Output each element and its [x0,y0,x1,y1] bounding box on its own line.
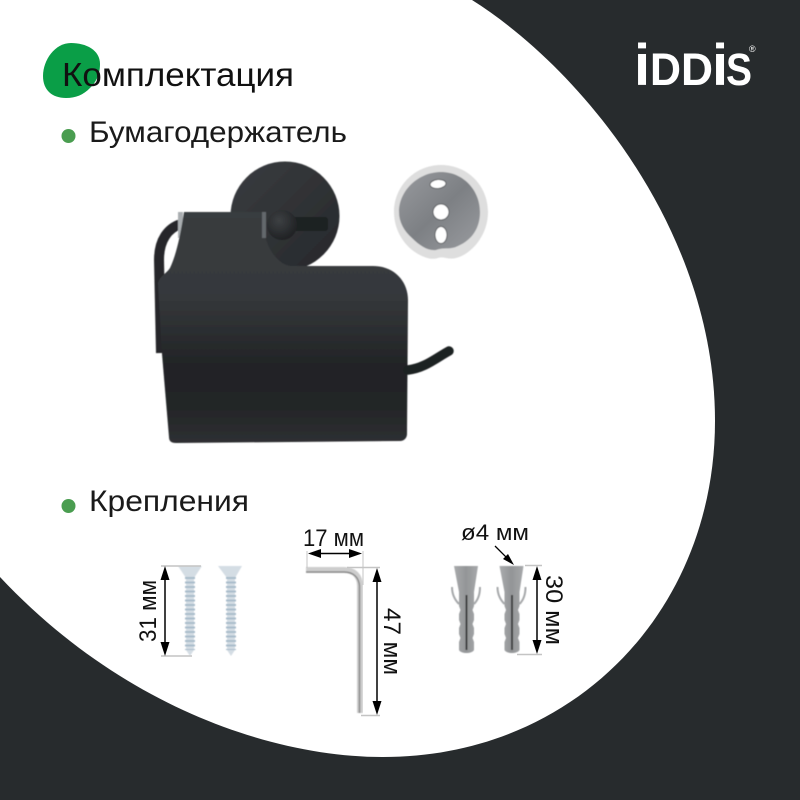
centre hole [433,204,449,220]
bottom hole [435,226,447,244]
dimension: 31 mm [135,566,201,656]
arm ring [178,212,183,238]
paper cover [158,212,408,443]
dimension: 47 mm: 47 мм [378,608,405,675]
icon: logo: i [712,33,728,98]
label: holder: Бумагодержатель [89,116,347,149]
plate rim [394,165,488,259]
icon: logo: S [726,44,752,95]
back arm [159,224,181,353]
top hole [430,179,446,189]
pin shaft [292,217,328,231]
screw 2 [218,566,242,656]
dimension: 17 mm: 17 мм [303,525,364,552]
dowel 2 [498,566,526,653]
dowel 1 [452,566,480,653]
dimension: 47 mm [347,568,405,716]
title: Комплектация [62,56,294,93]
dimension: 31 mm: 31 мм [135,580,162,642]
pin washer [262,212,266,238]
bullet: holder [62,129,76,143]
dimension: 30 mm: 30 мм [540,575,567,645]
dimension: diameter 4 mm: ø4 мм [461,520,529,545]
screw 1 [178,566,202,656]
dimension: diameter 4 mm [461,520,529,565]
hex key [306,570,360,713]
icon: logo: i [634,33,650,98]
label: fasteners: Крепления [89,485,249,518]
green blob behind title [43,43,100,98]
icon: logo: D [650,44,681,95]
plate face [399,172,480,250]
icon: logo [634,33,756,98]
wall disc [230,162,340,270]
dimension: 30 mm [517,566,567,654]
bullet: fasteners [62,499,76,513]
roll hook [408,351,449,370]
product: toilet paper holder [158,162,449,443]
pin knob [267,210,297,240]
icon: logo: ® [749,44,756,54]
icon: logo: D [681,44,713,95]
dimension: 17 mm [303,525,364,585]
product: mounting plate [394,165,488,259]
